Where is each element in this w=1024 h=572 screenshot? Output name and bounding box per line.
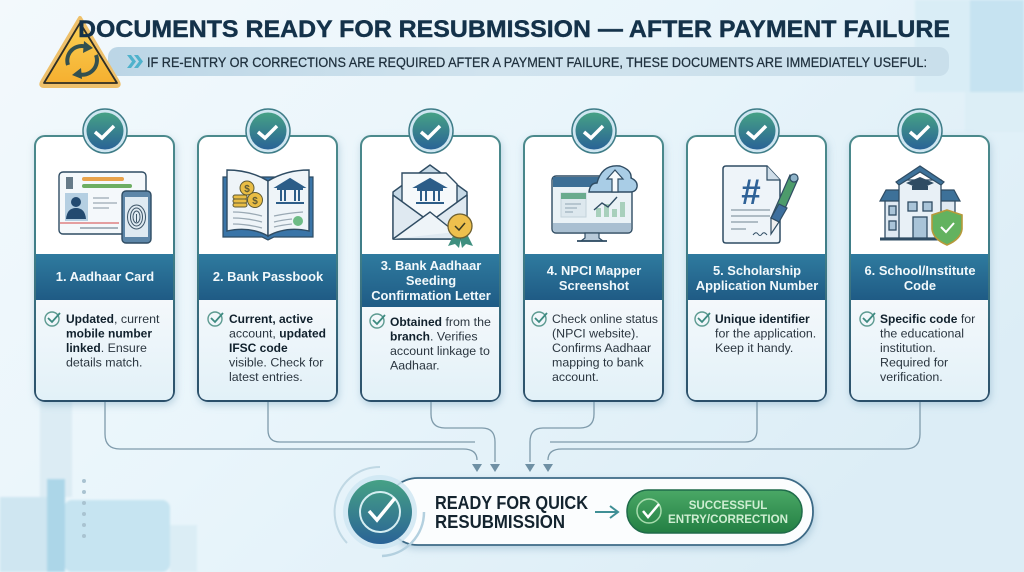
heading: 4. NPCI Mapper [547,263,641,278]
description: updated [279,326,326,340]
icon: check badge 6 [898,109,942,153]
description: Required for [880,356,948,370]
icon: check mark [370,314,385,328]
description: the educational [880,326,964,340]
icon: open passbook: $ [252,196,258,207]
description: account linkage to [390,344,490,358]
subtitle bar: IF RE-ENTRY OR CORRECTIONS ARE REQUIRED AFTER A PAYMENT FAILURE, THESE DOCUMENTS ARE IMMEDIATELY USEFUL: [147,54,927,70]
heading: 1. Aadhaar Card [56,269,154,284]
icon: check badge 3 [409,109,453,153]
description: Unique identifier [715,312,810,326]
panel: 5 Scholarship Application Number [687,136,826,401]
panel: 1 Aadhaar Card [35,136,174,401]
heading: 2. Bank Passbook [213,269,324,284]
description: from the [442,315,491,329]
description: Specific code [880,312,958,326]
icon: document with hash and pen [723,166,798,243]
heading: 3. Bank Aadhaar [381,258,481,273]
arrow [595,506,618,518]
panel: 3 Bank Aadhaar Seeding Confirmation Letter [361,136,500,401]
description: details match. [66,356,142,370]
description: . Ensure [101,341,147,355]
description: account. [552,370,599,384]
icon: check mark [532,312,547,326]
description: (NPCI website). [552,326,639,340]
icon: open passbook: $ [244,184,250,195]
icon: check badge 2 [246,109,290,153]
description: mapping to bank [552,356,644,370]
icon: school with shield [880,166,962,245]
description: Keep it handy. [715,341,793,355]
icon: monitor with cloud and chart [552,166,637,241]
icon: document with hash and pen: # [741,173,761,212]
description: . Verifies [430,330,478,344]
description: account, [229,326,279,340]
icon: check badge 5 [735,109,779,153]
icon: check mark [860,312,875,326]
icon: check badge 4 [572,109,616,153]
panel: 6 School/Institute Code [850,136,989,401]
icon: large check badge [335,467,424,556]
icon: Aadhaar card and phone [59,172,151,243]
badge: successful entry/correction: SUCCESSFUL [689,499,767,512]
description: Updated [66,312,114,326]
heading: Screenshot [559,278,630,293]
panel: ready for quick resubmission [335,467,813,556]
description: verification. [880,370,943,384]
description: latest entries. [229,370,303,384]
description: Obtained [390,315,442,329]
description: , current [114,312,160,326]
heading: Seeding [406,273,456,288]
badge: successful entry/correction: ENTRY/CORRECTION [668,513,788,526]
icon: check mark [45,312,60,326]
description: Confirms Aadhaar [552,341,651,355]
icon: check mark [208,312,223,326]
subtitle bar [108,47,949,76]
heading: Confirmation Letter [371,288,491,303]
panel: 4 NPCI Mapper Screenshot [524,136,663,401]
heading: Application Number [696,278,818,293]
description: IFSC code [229,341,288,355]
description: for [957,312,975,326]
description: branch [390,330,430,344]
icon: check mark [695,312,710,326]
icon: open passbook [223,170,313,240]
description: Current, active [229,312,313,326]
description: Aadhaar. [390,358,440,372]
description: linked [66,341,101,355]
panel: 2 Bank Passbook [198,136,337,401]
icon: warning triangle with refresh arrows [41,18,119,86]
text: ready for quick resubmission: READY FOR QUICK [435,493,588,513]
description: mobile number [66,326,152,340]
description: Check online status [552,312,658,326]
icon: check badge 1 [83,109,127,153]
connector lines [105,401,920,472]
title: DOCUMENTS READY FOR RESUBMISSION — AFTER PAYMENT FAILURE [78,16,950,43]
description: for the application. [715,326,816,340]
description: institution. [880,341,936,355]
heading: 6. School/Institute [864,263,976,278]
heading: Code [904,278,936,293]
badge: successful entry/correction [627,490,802,533]
description: visible. Check for [229,356,323,370]
heading: 5. Scholarship [713,263,801,278]
icon: envelope with letter and seal [393,165,473,248]
text: ready for quick resubmission: RESUBMISSION [435,512,565,532]
